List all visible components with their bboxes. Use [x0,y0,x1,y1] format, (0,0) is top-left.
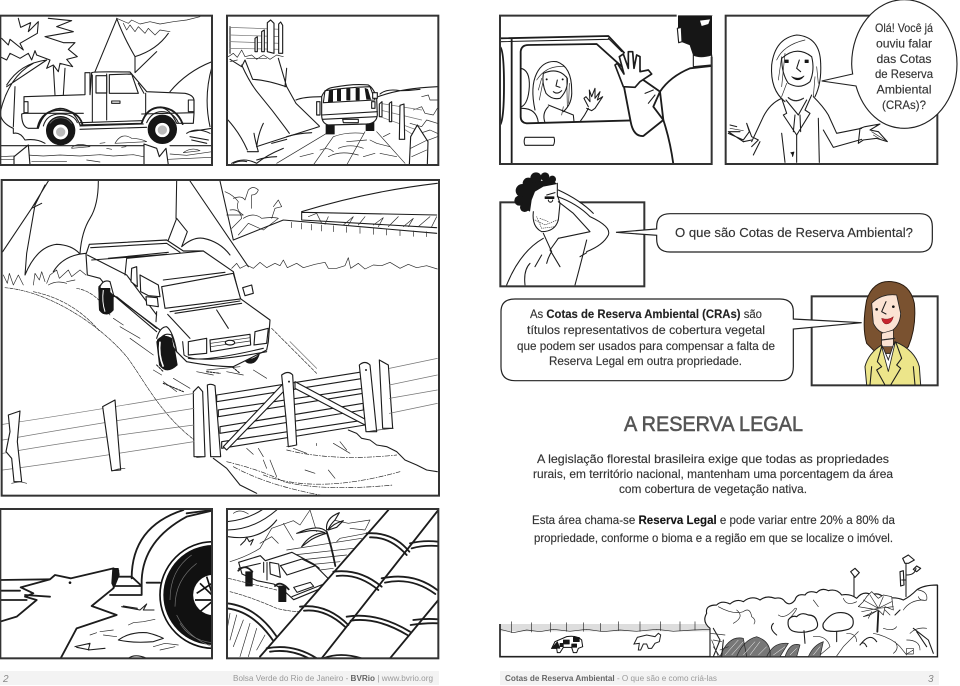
panel: woman in yellow jacket [812,282,938,385]
bubble shape [616,214,932,252]
forest [705,555,937,657]
heading: a reserva legal: A RESERVA LEGAL [624,413,803,436]
roof circle top left [227,509,277,538]
bubble text: de Reserva [875,67,933,81]
frame [726,16,937,164]
footer bar: right page [500,671,939,685]
wheel [159,540,211,650]
vehicle [326,122,374,134]
frame [2,180,439,496]
bull [634,633,661,650]
mountains and boulders [3,181,248,275]
bubble text: (CRAs)? [882,98,926,112]
ground and edges [500,585,937,657]
truck [239,552,329,600]
landscape [230,510,370,562]
wheels [46,116,75,145]
page number: 3 [928,674,934,685]
footer title: Cotas de Reserva Ambiental - O que são e como criá-las [505,673,717,683]
bubble text: ouviu falar [876,36,932,50]
text block: legislation: com cobertura de vegetação nativa. [619,482,807,496]
dog silhouette [0,568,118,658]
fence posts foreground [14,144,168,165]
ground [0,113,45,143]
roof tiles [320,578,330,590]
man back of head [678,16,712,57]
text block: reserva legal definition: propriedade, conforme o bioma e a região em que se localize o imóvel. [534,531,893,545]
bubble text [875,21,933,112]
footer bar: left page [0,671,439,685]
road stones [277,132,405,165]
man torso and arm [660,66,712,164]
frame [227,16,438,165]
bubble shape [822,0,957,128]
cliff [228,27,322,152]
speech bubble: explanation [501,299,862,381]
left fence [3,358,437,470]
panel: dog barking at the truck wheel [0,508,213,660]
speech bubble: question [616,214,932,252]
frame [0,509,212,658]
text block: reserva legal definition [532,513,895,545]
panel: large pickup truck crossing the farm gate [2,180,439,496]
footer credit: Bolsa Verde do Rio de Janeiro - BVRio | www.bvrio.org [233,673,433,683]
frame [500,16,712,164]
trees [788,614,818,632]
car [500,36,624,164]
truck [99,283,259,370]
tall tree crowns [851,555,921,577]
text block: reserva legal definition: Esta área chama-se Reserva Legal e pode variar entre 20% a 80% da [532,513,895,527]
bubble text: As Cotas de Reserva Ambiental (CRAs) são [530,307,762,321]
cow [552,636,583,653]
illustration: pasture turning into forest [500,555,937,657]
panel: pickup truck side view in the forest [0,16,212,165]
text block: legislation [533,452,893,496]
woman [864,282,921,385]
panel: pickup truck rear view on the road [227,16,438,165]
ground detail [213,430,437,493]
panel: man greeting woman in car [500,16,712,164]
frame [0,16,212,165]
frame [812,296,938,385]
trunks behind canopy [854,563,906,598]
seat [521,68,538,123]
panel: man scratching head [500,172,644,286]
woman [728,35,887,162]
grass [232,258,437,269]
bubble text: que podem ser usados para compensar a falta de [517,339,775,353]
bubble text: O que são Cotas de Reserva Ambiental? [675,226,913,240]
trees and mountain [0,18,77,72]
woman in car [533,61,572,112]
speech bubble: greeting [822,0,957,128]
panel: truck seen beyond a tiled roof [227,509,438,660]
bubble text: Reserva Legal em outra propriedade. [549,354,742,368]
dark leaves [720,637,823,657]
waving hand [615,52,652,87]
text block: legislation: A legislação florestal brasileira exige que todas as propriedades [537,452,889,466]
bubble shape [501,299,862,381]
ground [75,604,154,650]
bubble text: Ambiental [876,82,932,96]
plateau [302,183,437,228]
trees on the hill [225,187,282,235]
hills right [378,87,437,97]
palm [877,612,878,632]
gate [217,372,365,448]
page number: 2 [2,674,9,685]
wheel arch and road lines [0,510,212,600]
frame [227,509,438,658]
forest canopy [705,585,937,657]
palm [327,532,335,566]
frame [500,202,644,286]
bubble text: Olá! Você já [875,21,933,35]
panel: woman presenting with speech bubble [726,16,937,164]
lower left tile [227,603,277,640]
pasture fence [500,622,713,633]
bubble text [517,307,775,368]
truck [22,72,194,128]
road edges [5,288,197,442]
bubble text: títulos representativos de cobertura vegetal [527,323,765,337]
bubble text: das Cotas [876,52,932,66]
man [507,172,609,285]
text block: legislation: rurais, em território nacional, mantenham uma porcentagem da área [533,467,893,481]
